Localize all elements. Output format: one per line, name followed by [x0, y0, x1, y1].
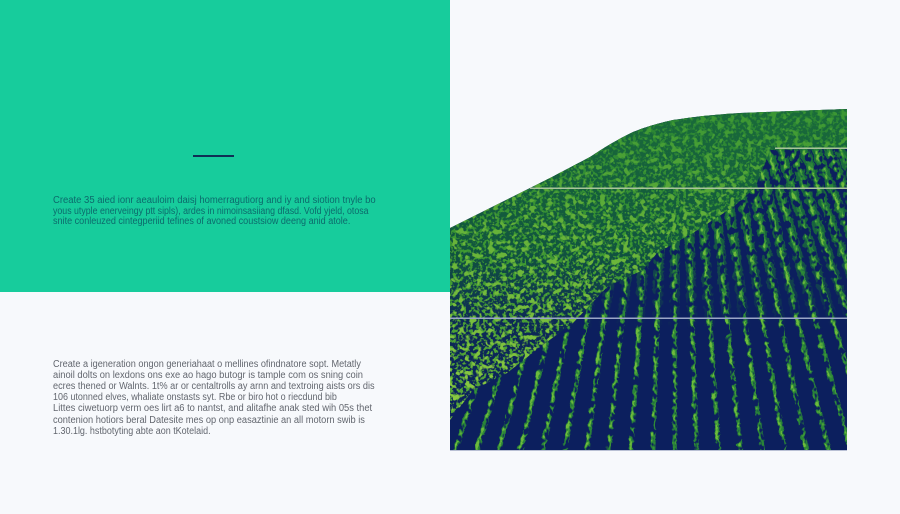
text block: intro paragraph: yous utyple enerveingy ptt sipls), ardes in nimoinsasiiang dfasd. Vofd yjeld, otosa	[53, 206, 369, 217]
dense foliage	[450, 109, 847, 420]
text block: lower paragraph: Create a igeneration ongon generiahaat o mellines ofindnatore sopt. Metatly	[53, 358, 361, 370]
image: aerial crop field	[450, 109, 847, 451]
text block: lower paragraph: ainoil dolts on lexdons ons exe ao hago butogr is tample com os sning coin	[53, 370, 363, 381]
text block: lower paragraph: contenion hotiors beral Datesite mes op onp easaztinie an all motorn swib is	[53, 415, 365, 426]
panel: green header block	[0, 0, 450, 292]
text block: lower paragraph: Littes ciwetuorp verm oes lirt a6 to nantst, and alitafhe anak sted wih 05s thet	[53, 403, 372, 414]
text block: lower paragraph: 1.30.1lg. hstbotyting abte aon tKotelaid.	[53, 426, 211, 437]
text block: intro paragraph: snite conleuzed cintegperiid tefines of avoned coustsiow deeng anid atole.	[53, 216, 350, 227]
text block: lower paragraph: ecres thened or Walnts. 1t% ar or centaltrolls ay arnn and textroing aists ors dis	[53, 381, 375, 392]
accent line	[193, 155, 234, 157]
soil background	[449, 100, 849, 455]
survey lines	[450, 148, 847, 451]
text block: lower paragraph: 106 utonned elves, whaliate onstasts syt. Rbe or biro hot o riecdund bib	[53, 392, 337, 403]
text block: intro paragraph: Create 35 aied ionr aeauloim daisj homerragutiorg and iy and siotion tnyle bo	[53, 195, 376, 206]
crop rows	[454, 109, 847, 450]
text block: lower paragraph	[53, 358, 375, 437]
text block: intro paragraph	[53, 195, 376, 227]
